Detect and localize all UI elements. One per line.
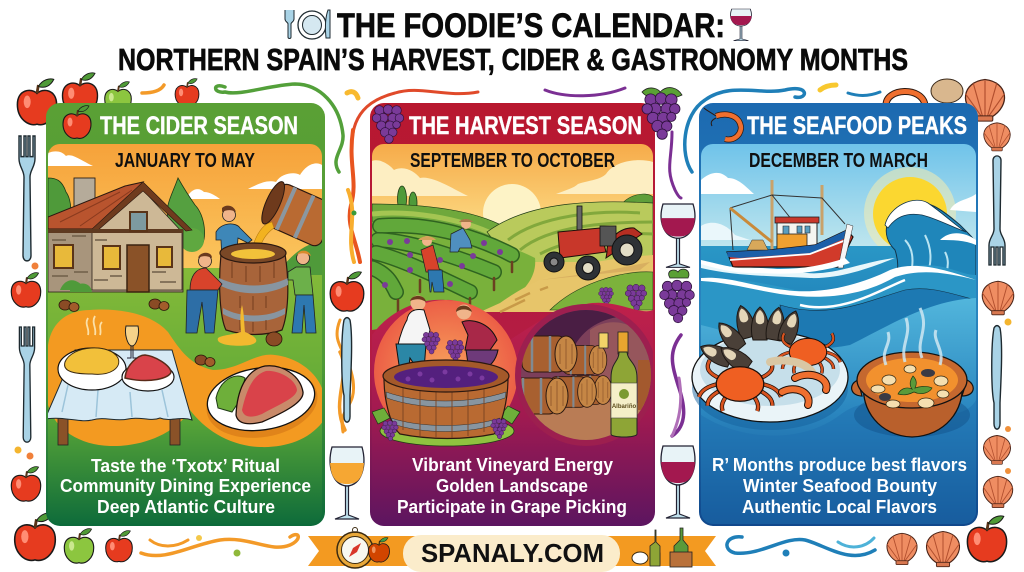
cellar circle (513, 304, 657, 446)
vineyard workers (418, 219, 473, 292)
shrimp (770, 360, 827, 405)
glasses and grapes centre-right (660, 204, 695, 518)
bullet text: cider: Deep Atlantic Culture (97, 497, 275, 517)
worker in green (288, 251, 316, 333)
sea and waves (701, 200, 976, 350)
bullet text: cider: Taste the ‘Txotx’ Ritual (91, 456, 280, 476)
bullet text: harvest (397, 455, 627, 517)
wine vat (384, 378, 508, 438)
tilted cider barrel (261, 181, 322, 246)
header: the harvest season: THE HARVEST SEASON (409, 112, 642, 140)
icon: grapes on panel corner (642, 88, 682, 139)
website pill (403, 535, 620, 572)
cider pouring (254, 222, 274, 243)
date: september to october: SEPTEMBER TO OCTOBER (410, 149, 615, 172)
decorative squiggles (141, 84, 880, 556)
small grape clusters (599, 284, 647, 311)
seafood stew (852, 308, 973, 437)
panel: cider season (45, 103, 337, 528)
seafood platter (692, 303, 848, 430)
icon: wine glass (730, 9, 752, 41)
bullet text: harvest: Participate in Grape Picking (397, 497, 627, 517)
white wine bottle with label: Albariño (612, 404, 636, 410)
bullet text: seafood (712, 455, 967, 517)
bullet text: cider (60, 456, 311, 517)
bullet text: seafood: Authentic Local Flavors (742, 497, 937, 517)
lower gradient (372, 300, 653, 448)
grape stomping circle (372, 296, 520, 446)
title: THE FOODIE’S CALENDAR: (337, 7, 725, 45)
bullet text: harvest: Golden Landscape (436, 476, 588, 496)
grape bunches in hand (422, 332, 440, 354)
apple border left and top (11, 73, 364, 563)
small food icons (632, 528, 692, 567)
date: december to march: DECEMBER TO MARCH (749, 149, 928, 172)
bullet text: seafood: R’ Months produce best flavors (712, 455, 967, 475)
large steak plate (206, 365, 318, 438)
cutlery and glasses centre-left (330, 318, 364, 519)
worker in red (186, 253, 222, 333)
small steak plate (122, 355, 174, 391)
orange dining blob (48, 310, 324, 447)
crabs (776, 333, 840, 373)
header: the cider season: THE CIDER SEASON (100, 112, 298, 140)
icon: apple (63, 106, 91, 138)
leaves and base (380, 422, 514, 446)
scene: golden sky and hills (372, 144, 653, 330)
compass icon (337, 528, 373, 568)
house (48, 178, 192, 292)
icon: plate and cutlery (285, 10, 330, 39)
fishing boat (727, 180, 853, 268)
title (118, 7, 908, 77)
man in red (456, 304, 499, 364)
foam under boat (701, 258, 850, 274)
small apple (368, 537, 390, 562)
table with tablecloth (45, 350, 192, 445)
bullet text: harvest: Vibrant Vineyard Energy (412, 455, 613, 475)
panel: seafood peaks (692, 103, 978, 526)
wine glass on table (125, 326, 139, 358)
icon: grapes (372, 105, 404, 143)
scene: sky and sun (701, 144, 976, 246)
steam (884, 308, 941, 365)
bullet text: seafood: Winter Seafood Bounty (743, 476, 937, 496)
lower gradient (701, 298, 976, 462)
cider barrel (218, 243, 288, 346)
omelette plate (58, 348, 126, 390)
decorative dots (14, 210, 1012, 556)
white wine bottle with label (611, 332, 637, 437)
header: the seafood peaks: THE SEAFOOD PEAKS (747, 112, 967, 140)
cutlery left (19, 136, 35, 442)
date: january to may: JANUARY TO MAY (115, 149, 255, 172)
man in white (396, 296, 430, 372)
panel: harvest season (370, 103, 657, 526)
worker in blue (216, 206, 252, 250)
tractor (544, 206, 642, 280)
footer banner (308, 528, 716, 572)
chestnuts (59, 299, 282, 366)
goose barnacles (697, 303, 804, 374)
scene: sky and village (48, 144, 322, 528)
bullet text: cider: Community Dining Experience (60, 476, 311, 496)
steam (87, 316, 102, 335)
vineyard rows (372, 225, 512, 312)
icon: prawn (704, 108, 741, 140)
seafood border right (886, 79, 1014, 567)
website pill: SPANALY.COM (421, 538, 604, 568)
